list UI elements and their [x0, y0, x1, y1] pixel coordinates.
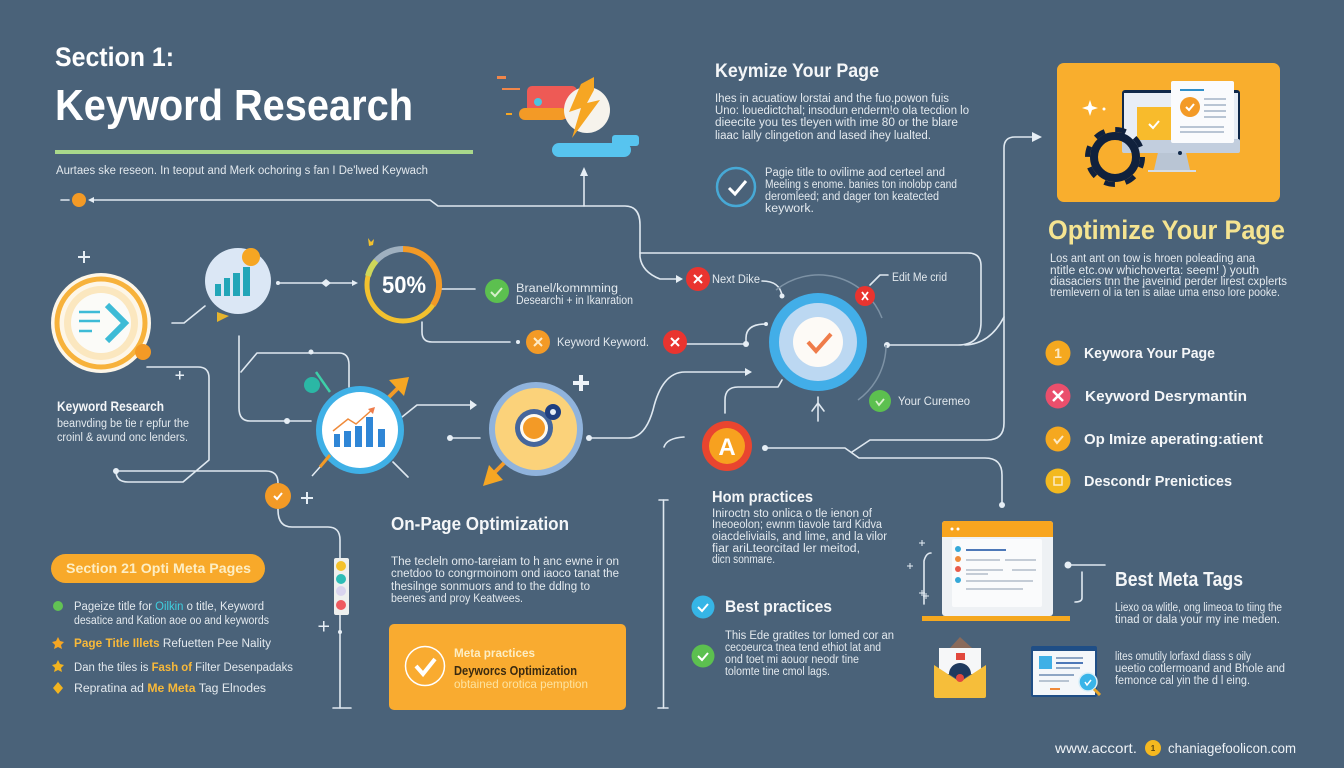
title block — [55, 42, 473, 177]
paragraph: Liexo oa wlitle, ong limeoa to tiing the — [1115, 602, 1282, 614]
chart: 50% progress ring: 50% — [382, 272, 426, 299]
connector lines — [61, 132, 1105, 708]
list item 1: 1 — [1054, 345, 1062, 361]
heading: Keymize Your Page — [715, 61, 879, 82]
marker: edit me — [855, 272, 947, 306]
paragraph: cnetdoo to congrmoinom ond iaoco tanat the — [391, 568, 619, 580]
status: red x markers and labels — [663, 267, 970, 412]
bullet 3: Dan the tiles is Fash of Filter Desenpadaks — [74, 662, 293, 674]
callout: meta practices: obtained orotica pemption — [454, 677, 588, 691]
paragraph: croinl & avund onc lenders. — [57, 432, 188, 444]
icon: gauge circle — [483, 375, 589, 486]
callout: check note: keywork. — [765, 203, 814, 215]
heading: Hom practices — [712, 489, 813, 506]
paragraph — [57, 418, 189, 444]
icon: browser with magnifier — [1031, 646, 1100, 697]
icon: lightning with speech cards — [497, 76, 639, 157]
second paragraph — [1115, 651, 1285, 687]
check mark — [698, 604, 708, 611]
text block: best practices — [692, 596, 894, 678]
marker: edit me: Edit Me crid — [892, 272, 947, 284]
callout: check note: Pagie title to ovilime aod certeel and — [765, 167, 945, 179]
icon: target arrow circle — [51, 273, 151, 373]
callout: meta practices: Deyworcs Optimization — [454, 663, 577, 678]
list item 4 — [1046, 468, 1232, 494]
text block: keyword research — [57, 398, 189, 444]
paragraph — [712, 508, 887, 566]
status: brainstorming: Branel/kommming — [516, 283, 618, 295]
paragraph: This Ede gratites tor lomed cor an — [725, 630, 894, 642]
callout: check note: deromleed; and dager ton keatected — [765, 191, 939, 203]
paragraph: Los ant ant on tow is hroen poleading ana — [1050, 253, 1256, 265]
bullet 2: Page Title Illets Refuetten Pee Nality — [74, 638, 271, 650]
second paragraph: lites omutily lorfaxd diass s oily — [1115, 651, 1251, 663]
chart: 50% progress ring — [367, 238, 439, 321]
paragraph — [725, 630, 894, 678]
paragraph: dicn sonmare. — [712, 554, 775, 566]
status: keyword: Keyword Keyword. — [557, 337, 649, 349]
status: keyword — [526, 330, 649, 354]
paragraph — [1050, 253, 1287, 299]
paragraph: oiacdeliviails, and lime, and la vilor — [712, 531, 887, 543]
list item 3: Op Imize aperating:atient — [1084, 431, 1263, 448]
paragraph: tinad or dala your my ine meden. — [1115, 614, 1280, 626]
icon: envelope — [934, 637, 986, 698]
heading: On-Page Optimization — [391, 514, 569, 534]
small orange node — [72, 193, 86, 207]
section label: Section 1: — [55, 42, 174, 72]
bullet 1: Pageize title for Oilkin o title, Keyword — [74, 601, 264, 613]
icon: cyan check — [692, 596, 714, 618]
bullet 1: desatice and Kation aoe oo and keywords — [74, 615, 269, 627]
list item 4: Descondr Prenictices — [1084, 473, 1232, 490]
check node — [265, 483, 291, 509]
decorative plus marks — [78, 251, 329, 632]
section pill: Section 21 Opti Meta Pages — [66, 560, 251, 576]
footer: chaniagefoolicon.com — [1168, 740, 1296, 756]
callout: meta practices — [389, 624, 626, 710]
text block: best meta tags — [1115, 569, 1285, 687]
marker: next title — [686, 267, 760, 291]
paragraph: Ihes in acuatiow lorstai and the fuo.powon fuis — [715, 93, 949, 105]
text block: optimize your page — [1048, 215, 1287, 299]
text block: hom practices — [712, 489, 887, 566]
heading: Keyword Research — [57, 398, 164, 414]
bullet list — [52, 601, 293, 695]
list item 3 — [1046, 426, 1263, 452]
paragraph — [391, 556, 619, 605]
status: brainstorming — [485, 279, 633, 307]
panel: monitor illustration — [1057, 63, 1280, 202]
green check mark — [698, 653, 708, 660]
list item 1 — [1046, 340, 1215, 366]
paragraph: Uno: louedictchal; insodun enderm!o ola tecdion lo — [715, 105, 969, 117]
icon: green check — [692, 644, 714, 668]
icon: letter A badge: A — [718, 434, 736, 461]
main heading: Keyword Research — [55, 81, 413, 130]
paragraph: diasaciers tnn the javeinid perder lirest cxplerts — [1050, 276, 1287, 288]
paragraph: fiar ariLteorcitad ler meitod, — [712, 543, 860, 555]
paragraph: The tecleln omo-tareiam to h anc ewne ir on — [391, 556, 619, 568]
heading: Best practices — [725, 597, 832, 616]
status: brainstorming: Desearchi + in Ikanration — [516, 295, 633, 307]
second paragraph: femonce cal yin the d l eing. — [1115, 675, 1250, 687]
icon: letter A badge — [702, 421, 752, 471]
list item 2: Keyword Desrymantin — [1085, 388, 1247, 405]
footer: www.accort. — [1054, 740, 1137, 756]
footer: 1 — [1151, 744, 1156, 753]
paragraph — [715, 93, 969, 142]
icon: traffic pill — [334, 558, 349, 615]
icon: browser on laptop — [907, 521, 1070, 621]
paragraph: tremlevern ol ia ten is ailae uma enso lore pooke. — [1050, 287, 1280, 299]
footer — [1054, 740, 1296, 756]
section pill — [51, 554, 265, 583]
subtitle: Aurtaes ske reseon. In teoput and Merk ochoring s fan I De'lwed Keywach — [56, 165, 428, 177]
paragraph — [1115, 602, 1282, 626]
paragraph: Iniroctn sto onlica o tle ienon of — [712, 508, 873, 520]
paragraph: thesilnge sonmuors and to the ddlng to — [391, 581, 590, 593]
marker: your curemeo — [869, 390, 970, 412]
paragraph: ntitle etc.ow whichoverta: seem! ) youth — [1050, 265, 1259, 277]
paragraph: dieecite you tes tleyen with ime 80 or the blare — [715, 117, 958, 129]
hub: central check circle — [769, 275, 886, 400]
numbered list — [1046, 340, 1263, 494]
bullet 4: Repratina ad Me Meta Tag Elnodes — [74, 683, 266, 695]
text block: keymize your page — [715, 61, 969, 142]
heading: Optimize Your Page — [1048, 215, 1285, 245]
list item 2 — [1046, 384, 1247, 408]
list item 1: Keywora Your Page — [1084, 345, 1215, 362]
callout: meta practices: Meta practices — [454, 646, 535, 660]
paragraph: liaac lally clingetion and lased ihey lualted. — [715, 130, 931, 142]
paragraph: Ineoeolon; ewnm tiavole tard Kidva — [712, 519, 883, 531]
second paragraph: ueetio cotlermoand and Bhole and — [1115, 663, 1285, 675]
icon: bar chart bubble — [205, 248, 271, 322]
paragraph: tolomte tine cmol lags. — [725, 666, 830, 678]
icon: analytics circle — [304, 372, 409, 476]
heading: Best Meta Tags — [1115, 569, 1243, 591]
callout: check note — [717, 167, 957, 215]
marker: left x — [663, 330, 687, 354]
paragraph: beenes and proy Keatwees. — [391, 593, 523, 605]
paragraph: ond toet mi aouor neodr tine — [725, 654, 859, 666]
bullet 1 — [53, 601, 269, 627]
heading rule — [55, 150, 473, 154]
paragraph: cecoeurca tnea tend ethiot lat and — [725, 642, 881, 654]
marker: next title: Next Dike — [712, 274, 760, 286]
callout: check note: Meeling s enome. banies ton inolobp cand — [765, 179, 957, 191]
text block: on-page optimization — [391, 514, 619, 605]
paragraph: beanvding be tie r epfur the — [57, 418, 189, 430]
marker: your curemeo: Your Curemeo — [898, 396, 970, 408]
